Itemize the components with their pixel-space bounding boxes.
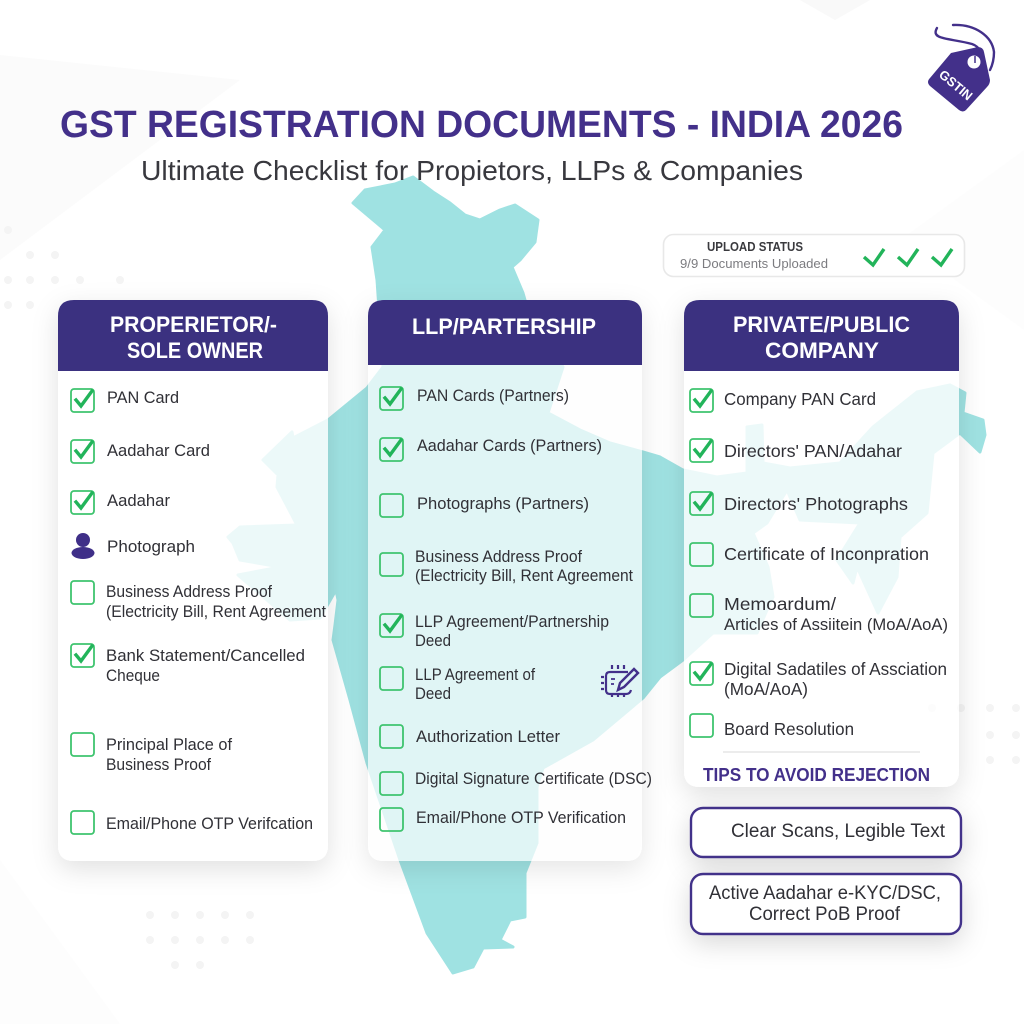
item: Aadahar Card xyxy=(71,440,210,463)
item: Digital Sadatiles xyxy=(690,659,947,699)
item: Aadahar: Aadahar xyxy=(107,492,171,510)
upload status box: UPLOAD STATUS xyxy=(707,240,803,254)
panel header xyxy=(368,300,642,365)
item: Principal Place: Business Proof xyxy=(106,756,211,774)
item: LLP Agreement of Deed: Deed xyxy=(415,685,451,703)
item: Email/Phone OTP xyxy=(71,811,313,834)
tip: active Aadahar xyxy=(691,874,961,934)
item: Business Address Proof xyxy=(380,548,633,585)
item: Board Resolution xyxy=(690,714,854,739)
item: Email/Phone OTP xyxy=(380,808,626,831)
subtitle: Ultimate Checklist for Propietors, LLPs & Companies xyxy=(141,155,803,186)
panel header: PROPERIETOR/- xyxy=(110,312,277,337)
upload status box xyxy=(664,234,964,276)
panel: private / public company xyxy=(684,300,959,787)
item: Photographs: Photographs (Partners) xyxy=(417,495,589,513)
tip: clear scans: Clear Scans, Legible Text xyxy=(731,821,946,842)
icon: GSTIN tag: GSTIN xyxy=(936,67,976,103)
item: LLP Agreement/Partnership: LLP Agreement/Partnership xyxy=(415,613,609,631)
panel header: SOLE OWNER xyxy=(127,338,263,363)
item: Business Address Proof: Business Address Proof xyxy=(106,583,272,601)
item: Bank Statement: Bank Statement/Cancelled xyxy=(106,647,305,665)
panel: LLP / partnership xyxy=(368,300,652,861)
item: Aadahar Cards: Aadahar Cards (Partners) xyxy=(417,437,602,455)
panel header: LLP/PARTERSHIP xyxy=(412,314,596,339)
item: Business Address Proof: Business Address Proof xyxy=(415,548,582,566)
item: Business Address Proof xyxy=(71,581,326,621)
tip: active Aadahar: Correct PoB Proof xyxy=(749,904,901,925)
item: Principal Place xyxy=(71,733,232,774)
item: Digital Sadatiles: (MoA/AoA) xyxy=(724,679,808,699)
item: Bank Statement: Cheque xyxy=(106,667,160,685)
item: Photograph xyxy=(72,533,195,559)
item: Email/Phone OTP: Email/Phone OTP Verifcation xyxy=(106,815,313,833)
item: PAN Card xyxy=(71,389,179,412)
tips heading: TIPS TO AVOID REJECTION xyxy=(703,765,930,785)
item: Business Address Proof: (Electricity Bill, Rent Agreement xyxy=(106,603,326,621)
item: Photographs xyxy=(380,494,589,517)
item: PAN Cards xyxy=(380,387,569,410)
item: Aadahar xyxy=(71,491,171,514)
item: Photograph: Photograph xyxy=(107,538,195,556)
item: Directors' PAN/Adahar: Directors' PAN/Adahar xyxy=(724,441,902,461)
panel: proprietor / sole owner xyxy=(58,300,328,861)
item: Digital Signature Certificate: Digital Signature Certificate (DSC) xyxy=(415,770,652,788)
tip: active Aadahar: Active Aadahar e-KYC/DSC, xyxy=(709,883,941,904)
item: PAN Cards: PAN Cards (Partners) xyxy=(417,387,569,405)
item: Authorization Letter: Authorization Letter xyxy=(416,728,561,746)
item: Memorandum: Memoardum/ xyxy=(724,594,836,614)
panel header: PRIVATE/PUBLIC xyxy=(733,312,910,337)
item: Certificate: Certificate of Inconpration xyxy=(724,544,929,564)
item: Email/Phone OTP: Email/Phone OTP Verification xyxy=(416,809,626,827)
panel header xyxy=(58,300,328,371)
panel header: COMPANY xyxy=(765,338,879,363)
item: Authorization Letter xyxy=(380,725,561,748)
tip: clear scans xyxy=(691,808,961,857)
item: Company PAN Card xyxy=(690,389,876,412)
icon: chip with pen xyxy=(601,665,638,697)
item: Memorandum: Articles of Assiitein (MoA/AoA) xyxy=(724,616,948,634)
item: Aadahar Card: Aadahar Card xyxy=(107,442,210,460)
item: Principal Place: Principal Place of xyxy=(106,736,232,754)
item: Memorandum xyxy=(690,594,948,634)
item: LLP Agreement/Partnership xyxy=(380,613,609,650)
item: Digital Signature Certificate xyxy=(380,770,652,795)
icon: GSTIN tag xyxy=(928,25,994,111)
upload status box: 9/9 Documents Uploaded xyxy=(680,257,828,271)
title: GST REGISTRATION DOCUMENTS - INDIA 2026 xyxy=(60,104,903,146)
item: Aadahar Cards xyxy=(380,437,602,461)
item: PAN Card: PAN Card xyxy=(107,389,179,407)
map of India xyxy=(228,177,985,973)
item: Directors' Photographs: Directors' Photographs xyxy=(724,494,908,514)
item: LLP Agreement of Deed xyxy=(380,666,535,703)
item: Board Resolution: Board Resolution xyxy=(724,719,854,739)
item: Company PAN Card: Company PAN Card xyxy=(724,389,876,409)
item: LLP Agreement/Partnership: Deed xyxy=(415,632,451,650)
item: Digital Sadatiles: Digital Sadatiles of Assciation xyxy=(724,659,947,679)
panel header xyxy=(684,300,959,371)
item: Bank Statement xyxy=(71,644,305,685)
item: Business Address Proof: (Electricity Bill, Rent Agreement xyxy=(415,567,633,585)
item: LLP Agreement of Deed: LLP Agreement of xyxy=(415,666,535,684)
